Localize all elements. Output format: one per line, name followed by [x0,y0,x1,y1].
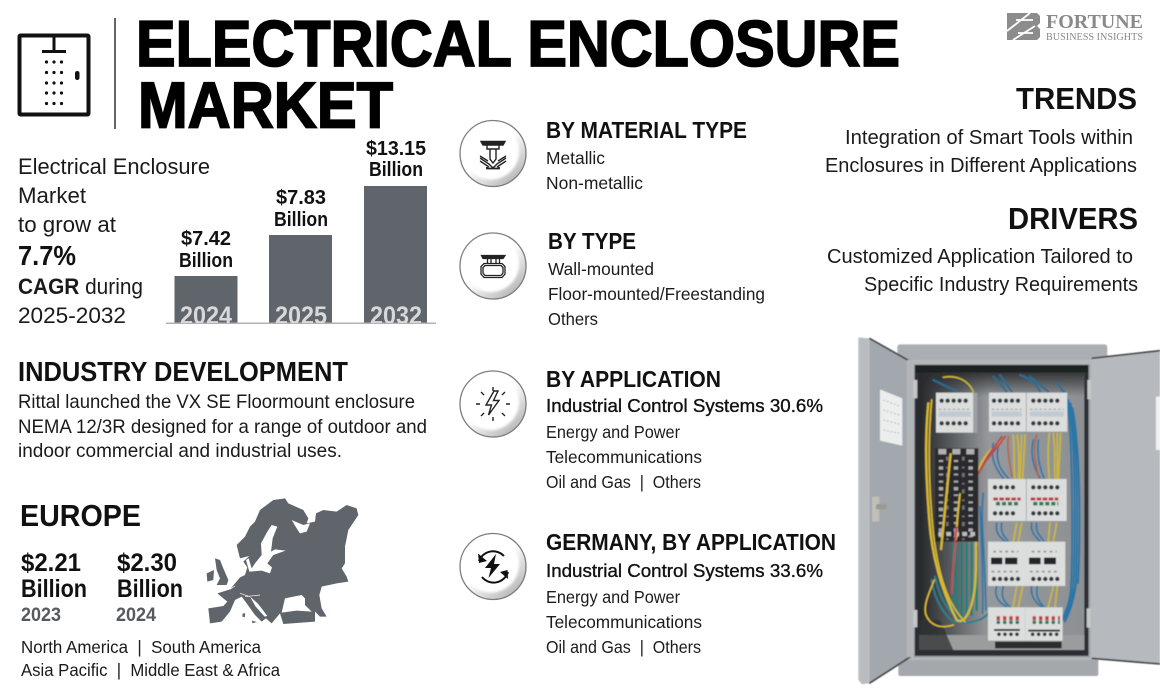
title: ELECTRICAL ENCLOSURE [136,7,900,80]
panel: drivers: DRIVERS [1008,201,1138,236]
text block: CAGR summary: to grow at [18,212,117,237]
panel: drivers: Customized Application Tailored to [827,246,1133,268]
panel: trends: TRENDS [1016,81,1137,116]
bar chart: market size: 2025 [275,302,327,330]
segment heading: by application: BY APPLICATION [546,366,721,392]
segment heading: by application: Oil and Gas | Others [546,472,701,492]
title [136,7,900,142]
segment heading: Germany by application: Oil and Gas | Others [546,637,701,657]
panel: industry development: NEMA 12/3R designed for a range of outdoor and [18,416,427,438]
panel: industry development: INDUSTRY DEVELOPMENT [18,356,348,387]
text block: CAGR summary: CAGR during [18,274,143,299]
segment icon: application [460,371,526,437]
bar chart: market size [166,138,436,330]
segment heading: by type: BY TYPE [548,228,636,254]
segment heading: by type: Floor-mounted/Freestanding [548,284,765,304]
illustration: open electrical enclosure cabinet [858,337,1160,684]
segment heading: by type: Wall-mounted [548,259,654,279]
bar chart: market size: Billion [274,209,328,231]
text block: CAGR summary: 2025-2032 [18,303,126,328]
panel: Europe: $2.21 [21,549,81,577]
panel: Europe: $2.30 [117,549,177,577]
bar chart: market size: $13.15 [366,138,426,160]
bar chart: market size: 2024 [180,302,232,330]
panel: Europe: 2023 [21,605,61,626]
icon: electrical enclosure [20,36,88,114]
panel: industry development: indoor commercial and industrial uses. [18,440,342,462]
panel: drivers [827,201,1138,296]
segment heading: Germany by application: Industrial Control Systems 33.6% [546,561,823,581]
panel: Europe: North America | South America [21,637,261,657]
segment icon: Germany by application [460,534,526,600]
panel: industry development [18,356,427,462]
segment heading: by material type [546,117,747,193]
segment heading: Germany by application: Telecommunications [546,612,702,632]
text block: CAGR summary: 7.7% [18,240,76,271]
panel: Europe: EUROPE [20,498,141,533]
cabinet wiring [925,375,1080,627]
segment heading: by application: Industrial Control Systems 30.6% [546,396,823,416]
segment heading: by application: Telecommunications [546,447,702,467]
segment heading: Germany by application [546,529,836,657]
title: MARKET [138,68,393,142]
panel: Europe: Billion [117,575,183,603]
segment heading: by application: Energy and Power [546,422,680,442]
bar chart: market size: $7.42 [181,228,231,250]
segment heading: by application [546,366,823,492]
bar chart: market size: Billion [369,159,423,181]
segment heading: by material type: Non-metallic [546,173,643,193]
cabinet terminal block [935,448,978,550]
segment heading: by type [548,228,765,329]
map: Europe [207,498,358,624]
logo: Fortune Business Insights: BUSINESS INSIGHTS [1046,32,1143,43]
segment heading: Germany by application: GERMANY, BY APPLICATION [546,529,836,555]
panel: drivers: Specific Industry Requirements [864,274,1138,296]
panel: industry development: Rittal launched the VX SE Floormount enclosure [18,391,415,413]
bar chart: market size: Billion [179,250,233,272]
segment icon: material type [460,120,526,186]
bar chart: market size: 2032 [370,302,422,330]
cabinet breaker modules [936,393,1067,641]
panel: trends: Integration of Smart Tools within [845,127,1133,149]
text block: CAGR summary [18,154,210,328]
segment heading: by material type: BY MATERIAL TYPE [546,117,747,143]
panel: Europe: Billion [21,575,87,603]
segment heading: Germany by application: Energy and Power [546,587,680,607]
panel: trends: Enclosures in Different Applications [825,155,1137,177]
text block: CAGR summary: Electrical Enclosure [18,154,210,179]
panel: trends [825,81,1137,177]
segment heading: by material type: Metallic [546,148,605,168]
segment heading: by type: Others [548,309,598,329]
logo: Fortune Business Insights [1007,11,1143,43]
text block: CAGR summary: Market [18,183,87,208]
segment icon: type [460,233,526,299]
bar chart: market size: $7.83 [276,187,326,209]
panel: Europe: Asia Pacific | Middle East & Africa [21,660,280,680]
title divider [114,18,116,129]
logo: Fortune Business Insights: FORTUNE [1046,11,1143,33]
panel: Europe [20,498,280,680]
panel: Europe: 2024 [116,605,156,626]
